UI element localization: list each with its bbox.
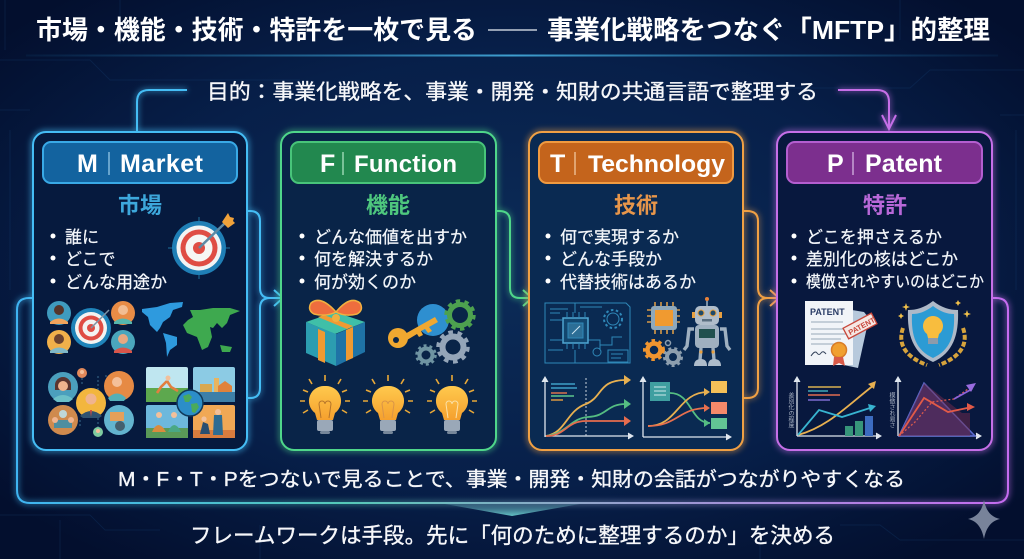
icon: gears [644,340,682,366]
bullets: Market [50,228,167,292]
bullets: Patent: どこを押さえるか [806,228,942,247]
chart: imitation risk [888,377,981,439]
conclusion text: フレームワークは手段。先に「何のために整理するのか」を決める [190,524,835,548]
connector T to P [743,211,780,398]
bullets: Patent [792,228,984,291]
bottom feedback frame [17,298,1008,503]
header: P Patent: P [827,150,844,178]
header: P Patent [787,142,982,183]
bullets: Patent: 差別化の核はどこか [806,250,958,269]
chart: technology trends [542,375,633,439]
header: F Function: F [320,150,335,178]
icon: chip [647,302,680,334]
chart: differentiation [787,377,881,439]
icon: robot [684,297,730,366]
panel: Market [33,132,247,450]
header: M Market: M [77,150,98,178]
header: T Technology: T [550,150,565,178]
heading: 特許: 特許 [863,193,907,218]
icon: shield with bulb [898,300,971,365]
header: F Function: Function [354,151,457,178]
icon: target and people [47,301,135,354]
icon: sparkle [968,500,1000,539]
title: 事業化戦略をつなぐ「MFTP」的整理 [547,15,990,45]
bullets: Technology [546,228,696,292]
arrow: down triangle [445,504,580,516]
bullets: Market: どんな用途か [65,273,167,292]
bullets: Market: どこで [65,250,116,269]
header: T Technology: Technology [588,151,725,178]
icon: world map [142,302,240,357]
bullets: Function [300,228,467,292]
bullets: Market: 誰に [65,228,99,247]
icon: people network [48,368,134,437]
chart: technology mapping [640,377,731,440]
panel: Technology [529,132,743,450]
icon: patent document: PATENT [847,315,877,337]
icon: target [168,213,235,279]
bullets: Technology: どんな手段か [560,250,662,269]
icon: patent document: PATENT [810,307,845,317]
heading: 機能: 機能 [366,193,410,218]
bullets: Technology: 何で実現するか [560,228,679,247]
chart: differentiation: 差別化の程度 [787,391,794,429]
bullets: Function: 何を解決するか [314,250,433,269]
heading: 技術: 技術 [614,193,658,218]
header: T Technology [539,142,733,183]
icon: key and gears [388,301,474,364]
header: M Market [43,142,237,183]
connector M to F [247,211,284,398]
connector F to T [496,211,532,306]
panel: Patent [777,132,992,450]
icon: use-case tiles [146,367,235,438]
heading: 市場: 市場 [118,193,162,218]
bullets: Patent: 模倣されやすいのはどこか [806,273,984,291]
chart: imitation risk: 模倣され易さ [888,391,895,429]
bullets: Technology: 代替技術はあるか [560,273,696,292]
icon: gift box [306,300,365,366]
header: P Patent: Patent [865,150,943,178]
icon: blueprint [545,303,630,363]
summary text: M・F・T・Pをつないで見ることで、事業・開発・知財の会話がつながりやすくなる [118,468,905,491]
panel: Function [281,132,496,450]
arrow: purpose from Market [137,90,187,132]
bullets: Function: 何が効くのか [314,273,416,292]
header: M Market: Market [120,150,204,178]
header: F Function [291,142,485,183]
title [36,15,990,45]
title: 市場・機能・技術・特許を一枚で見る [36,15,477,45]
purpose line: 目的：事業化戦略を、事業・開発・知財の共通言語で整理する [207,81,818,104]
arrow: purpose to Patent [838,90,896,129]
icon: three light bulbs [300,375,477,434]
icon: patent document [805,301,877,368]
bullets: Function: どんな価値を出すか [314,228,467,247]
